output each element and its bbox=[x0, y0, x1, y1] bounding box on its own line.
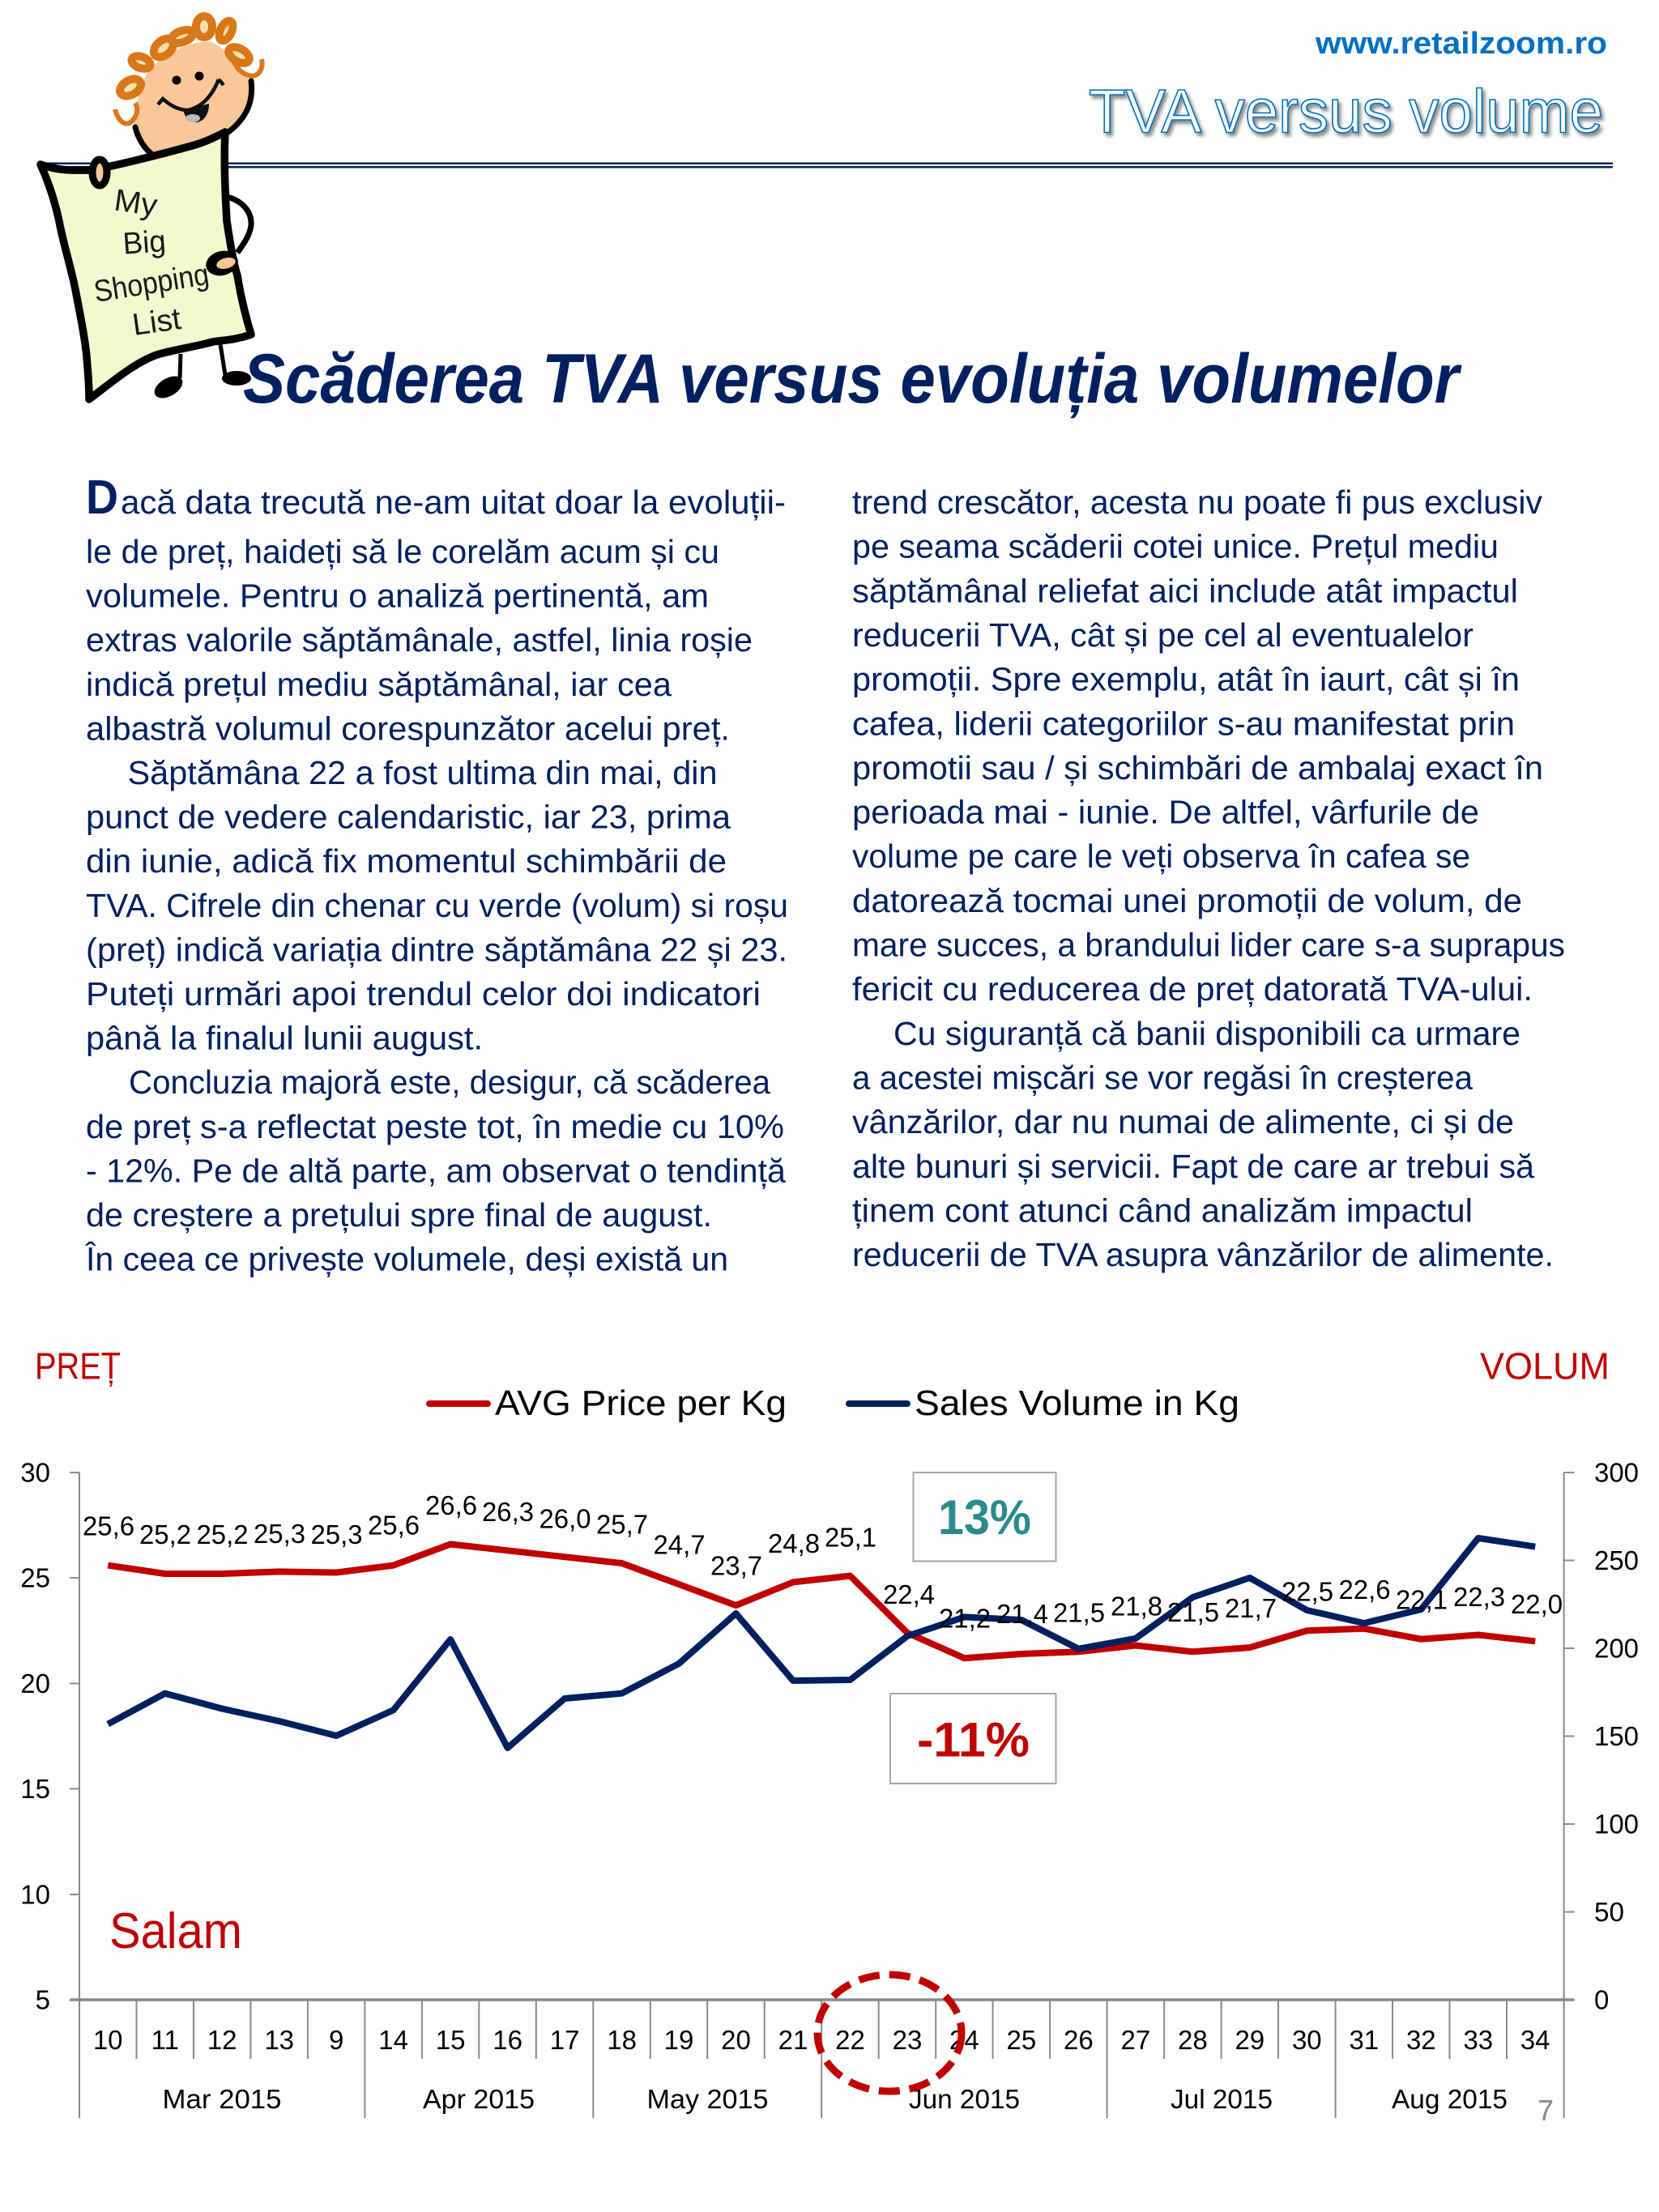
price data labels: 25,1 bbox=[825, 1523, 876, 1553]
legend: price: AVG Price per Kg bbox=[495, 1383, 787, 1423]
price data labels: 21,5 bbox=[1053, 1597, 1105, 1628]
left text column: - 12%. Pe de altă parte, am observat o tendință bbox=[86, 1152, 786, 1189]
month labels: Mar 2015 bbox=[162, 2084, 282, 2114]
left axis labels bbox=[20, 1458, 50, 2015]
paper text: Shopping bbox=[92, 258, 211, 309]
chart legend bbox=[429, 1383, 1239, 1423]
week labels: 20 bbox=[721, 2025, 751, 2055]
left text column: acă data trecută ne-am uitat doar la evoluții- bbox=[121, 484, 786, 521]
right axis labels: 200 bbox=[1594, 1633, 1639, 1664]
legend: volume: Sales Volume in Kg bbox=[915, 1383, 1239, 1423]
left axis labels: 30 bbox=[20, 1458, 50, 1487]
right text column: Cu siguranță că banii disponibili ca urmare bbox=[893, 1015, 1520, 1052]
head bbox=[134, 41, 252, 154]
right arm bbox=[227, 197, 251, 253]
axes and gridline ticks bbox=[70, 1473, 1575, 2118]
volume line bbox=[108, 1538, 1535, 1748]
price data labels: 21,8 bbox=[1111, 1592, 1162, 1622]
callout: price variation -11% bbox=[890, 1694, 1056, 1784]
dashed circle around weeks 22 and 23 bbox=[817, 1975, 962, 2091]
callout: price variation -11%: -11% bbox=[917, 1712, 1030, 1767]
price data labels: 22,5 bbox=[1282, 1576, 1333, 1606]
week labels: 18 bbox=[607, 2025, 637, 2055]
left text column: albastră volumul corespunzător acelui preț. bbox=[86, 710, 730, 747]
left text column: Săptămâna 22 a fost ultima din mai, din bbox=[128, 754, 718, 791]
price data labels: 23,7 bbox=[710, 1551, 762, 1581]
paper bbox=[41, 132, 251, 399]
left text column: Puteți urmări apoi trendul celor doi indicatori bbox=[86, 975, 761, 1012]
callout: volume variation 13% bbox=[914, 1473, 1056, 1562]
left text column: (preț) indică variația dintre săptămâna 22 și 23. bbox=[86, 931, 787, 968]
legs and feet bbox=[151, 344, 251, 403]
week labels: 16 bbox=[493, 2025, 522, 2055]
week labels: 31 bbox=[1349, 2025, 1379, 2055]
right axis labels bbox=[1594, 1458, 1639, 2015]
price data labels: 25,6 bbox=[368, 1511, 420, 1541]
hair curls bbox=[115, 16, 262, 124]
price data labels: 22,1 bbox=[1396, 1584, 1448, 1614]
right text column bbox=[852, 484, 1565, 1273]
price data labels: 26,3 bbox=[482, 1497, 534, 1527]
week labels: 34 bbox=[1520, 2025, 1550, 2055]
left text column: În ceea ce privește volumele, deși există un bbox=[85, 1241, 728, 1278]
month labels: May 2015 bbox=[646, 2084, 768, 2114]
week labels: 13 bbox=[264, 2025, 294, 2055]
article heading: Scăderea TVA versus evoluția volumelor bbox=[243, 340, 1462, 418]
week labels: 12 bbox=[207, 2025, 237, 2055]
price data labels: 24,8 bbox=[768, 1528, 820, 1558]
week labels: 28 bbox=[1178, 2025, 1208, 2055]
week labels: 24 bbox=[949, 2025, 979, 2055]
price data labels: 21,2 bbox=[939, 1604, 991, 1634]
price data labels: 22,0 bbox=[1511, 1589, 1563, 1619]
right axis labels: 150 bbox=[1594, 1721, 1639, 1751]
price data labels bbox=[83, 1490, 1563, 1634]
month labels bbox=[162, 2084, 1508, 2114]
right text column: datorează tocmai unei promoții de volum, de bbox=[852, 882, 1522, 919]
month labels: Apr 2015 bbox=[423, 2084, 535, 2114]
right text column: fericit cu reducerea de preț datorată TVA-ului. bbox=[852, 970, 1533, 1008]
paper text: My bbox=[112, 183, 160, 223]
header title: TVA versus volume: TVA versus volume bbox=[1089, 78, 1603, 146]
right axis labels: 50 bbox=[1594, 1897, 1624, 1927]
right text column: mare succes, a brandului lider care s-a suprapus bbox=[852, 927, 1565, 964]
right text column: ținem cont atunci când analizăm impactul bbox=[852, 1191, 1473, 1229]
price data labels: 25,2 bbox=[139, 1519, 191, 1549]
hands bbox=[92, 160, 241, 279]
header double rule bbox=[45, 162, 1613, 168]
left text column: de preț s-a reflectat peste tot, în medie cu 10% bbox=[86, 1108, 784, 1145]
line chart bbox=[20, 1458, 1639, 2118]
left axis labels: 15 bbox=[20, 1774, 50, 1804]
left axis labels: 10 bbox=[20, 1879, 50, 1910]
left text column: volumele. Pentru o analiză pertinentă, am bbox=[86, 578, 709, 615]
week labels: 33 bbox=[1463, 2025, 1493, 2055]
left axis labels: 20 bbox=[20, 1669, 50, 1698]
price data labels: 22,6 bbox=[1338, 1575, 1390, 1605]
week labels: 27 bbox=[1121, 2025, 1150, 2055]
left text column bbox=[85, 471, 788, 1278]
week labels: 25 bbox=[1007, 2025, 1036, 2055]
right text column: vânzărilor, dar nu numai de alimente, ci și de bbox=[852, 1103, 1514, 1140]
month labels: Aug 2015 bbox=[1392, 2084, 1508, 2114]
left axis labels: 5 bbox=[36, 1984, 50, 2015]
price data labels: 22,3 bbox=[1453, 1582, 1505, 1612]
week labels: 15 bbox=[436, 2025, 465, 2055]
right axis labels: 300 bbox=[1594, 1458, 1639, 1487]
paper text: List bbox=[130, 302, 183, 343]
paper text: Big bbox=[122, 224, 167, 262]
face bbox=[158, 71, 224, 122]
icon: character holding shopping list bbox=[41, 16, 262, 403]
right text column: pe seama scăderii cotei unice. Prețul mediu bbox=[852, 528, 1499, 565]
price data labels: 25,7 bbox=[596, 1510, 648, 1540]
week labels: 22 bbox=[835, 2025, 865, 2055]
left text column: din iunie, adică fix momentul schimbării de bbox=[86, 842, 727, 880]
price data labels: 25,2 bbox=[196, 1519, 248, 1549]
drop cap: D bbox=[86, 471, 118, 524]
week labels: 14 bbox=[378, 2025, 408, 2055]
right text column: trend crescător, acesta nu poate fi pus exclusiv bbox=[852, 484, 1542, 521]
price data labels: 25,6 bbox=[83, 1511, 134, 1541]
right text column: reducerii TVA, cât și pe cel al eventualelor bbox=[852, 616, 1473, 654]
price data labels: 26,0 bbox=[539, 1503, 591, 1533]
week labels: 19 bbox=[664, 2025, 693, 2055]
week labels: 10 bbox=[93, 2025, 123, 2055]
right text column: promotii sau / și schimbări de ambalaj exact în bbox=[852, 749, 1543, 786]
month labels: Jul 2015 bbox=[1171, 2084, 1273, 2114]
paper text bbox=[92, 183, 211, 343]
week labels: 32 bbox=[1406, 2025, 1436, 2055]
left text column: Concluzia majoră este, desigur, că scăderea bbox=[129, 1063, 770, 1101]
price data labels: 24,7 bbox=[653, 1530, 705, 1560]
right text column: volume pe care le veți observa în cafea se bbox=[852, 837, 1470, 875]
right text column: săptămânal reliefat aici include atât impactul bbox=[852, 572, 1518, 609]
page number: 7 bbox=[1537, 2094, 1554, 2127]
week labels: 17 bbox=[550, 2025, 579, 2055]
right text column: perioada mai - iunie. De altfel, vârfurile de bbox=[852, 794, 1479, 831]
price data labels: 21,7 bbox=[1225, 1593, 1277, 1623]
left axis caption: PREȚ: PREȚ bbox=[35, 1345, 121, 1387]
left axis labels: 25 bbox=[20, 1563, 50, 1592]
week labels: 11 bbox=[151, 2025, 179, 2055]
price data labels: 25,3 bbox=[311, 1519, 363, 1549]
week labels bbox=[93, 2025, 1550, 2055]
right text column: a acestei mișcări se vor regăsi în creșterea bbox=[852, 1059, 1473, 1097]
price data labels: 25,3 bbox=[254, 1519, 305, 1549]
right axis labels: 100 bbox=[1594, 1809, 1639, 1839]
price data labels: 22,4 bbox=[883, 1579, 935, 1609]
week labels: 23 bbox=[893, 2025, 922, 2055]
week labels: 9 bbox=[329, 2025, 343, 2055]
price data labels: 21,4 bbox=[996, 1599, 1048, 1629]
right axis caption: VOLUM: VOLUM bbox=[1480, 1345, 1610, 1387]
left text column: de creștere a prețului spre final de august. bbox=[86, 1196, 712, 1234]
right axis labels: 250 bbox=[1594, 1545, 1639, 1575]
week labels: 29 bbox=[1235, 2025, 1265, 2055]
left text column: extras valorile săptămânale, astfel, linia roșie bbox=[86, 621, 753, 658]
right text column: reducerii de TVA asupra vânzărilor de alimente. bbox=[852, 1236, 1554, 1273]
price data labels: 26,6 bbox=[425, 1490, 477, 1520]
week labels: 30 bbox=[1292, 2025, 1322, 2055]
week labels: 26 bbox=[1064, 2025, 1094, 2055]
price data labels: 21,5 bbox=[1167, 1597, 1219, 1627]
category label: Salam: Salam bbox=[109, 1903, 242, 1959]
left text column: punct de vedere calendaristic, iar 23, prima bbox=[86, 799, 731, 836]
right text column: cafea, liderii categoriilor s-au manifestat prin bbox=[852, 705, 1515, 742]
month labels: Jun 2015 bbox=[909, 2084, 1020, 2114]
right text column: promoții. Spre exemplu, atât în iaurt, cât și în bbox=[852, 661, 1520, 698]
right text column: alte bunuri și servicii. Fapt de care ar trebui să bbox=[852, 1148, 1534, 1185]
website address: www.retailzoom.ro bbox=[1315, 27, 1607, 61]
price line bbox=[108, 1544, 1535, 1658]
week labels: 21 bbox=[778, 2025, 808, 2055]
right axis labels: 0 bbox=[1594, 1984, 1609, 2015]
left text column: TVA. Cifrele din chenar cu verde (volum) si roșu bbox=[86, 887, 788, 924]
callout: volume variation 13%: 13% bbox=[938, 1490, 1031, 1545]
left text column: indică prețul mediu săptămânal, iar cea bbox=[86, 666, 672, 703]
left text column: până la finalul lunii august. bbox=[86, 1020, 483, 1057]
left text column: le de preț, haideți să le corelăm acum și cu bbox=[86, 533, 719, 570]
